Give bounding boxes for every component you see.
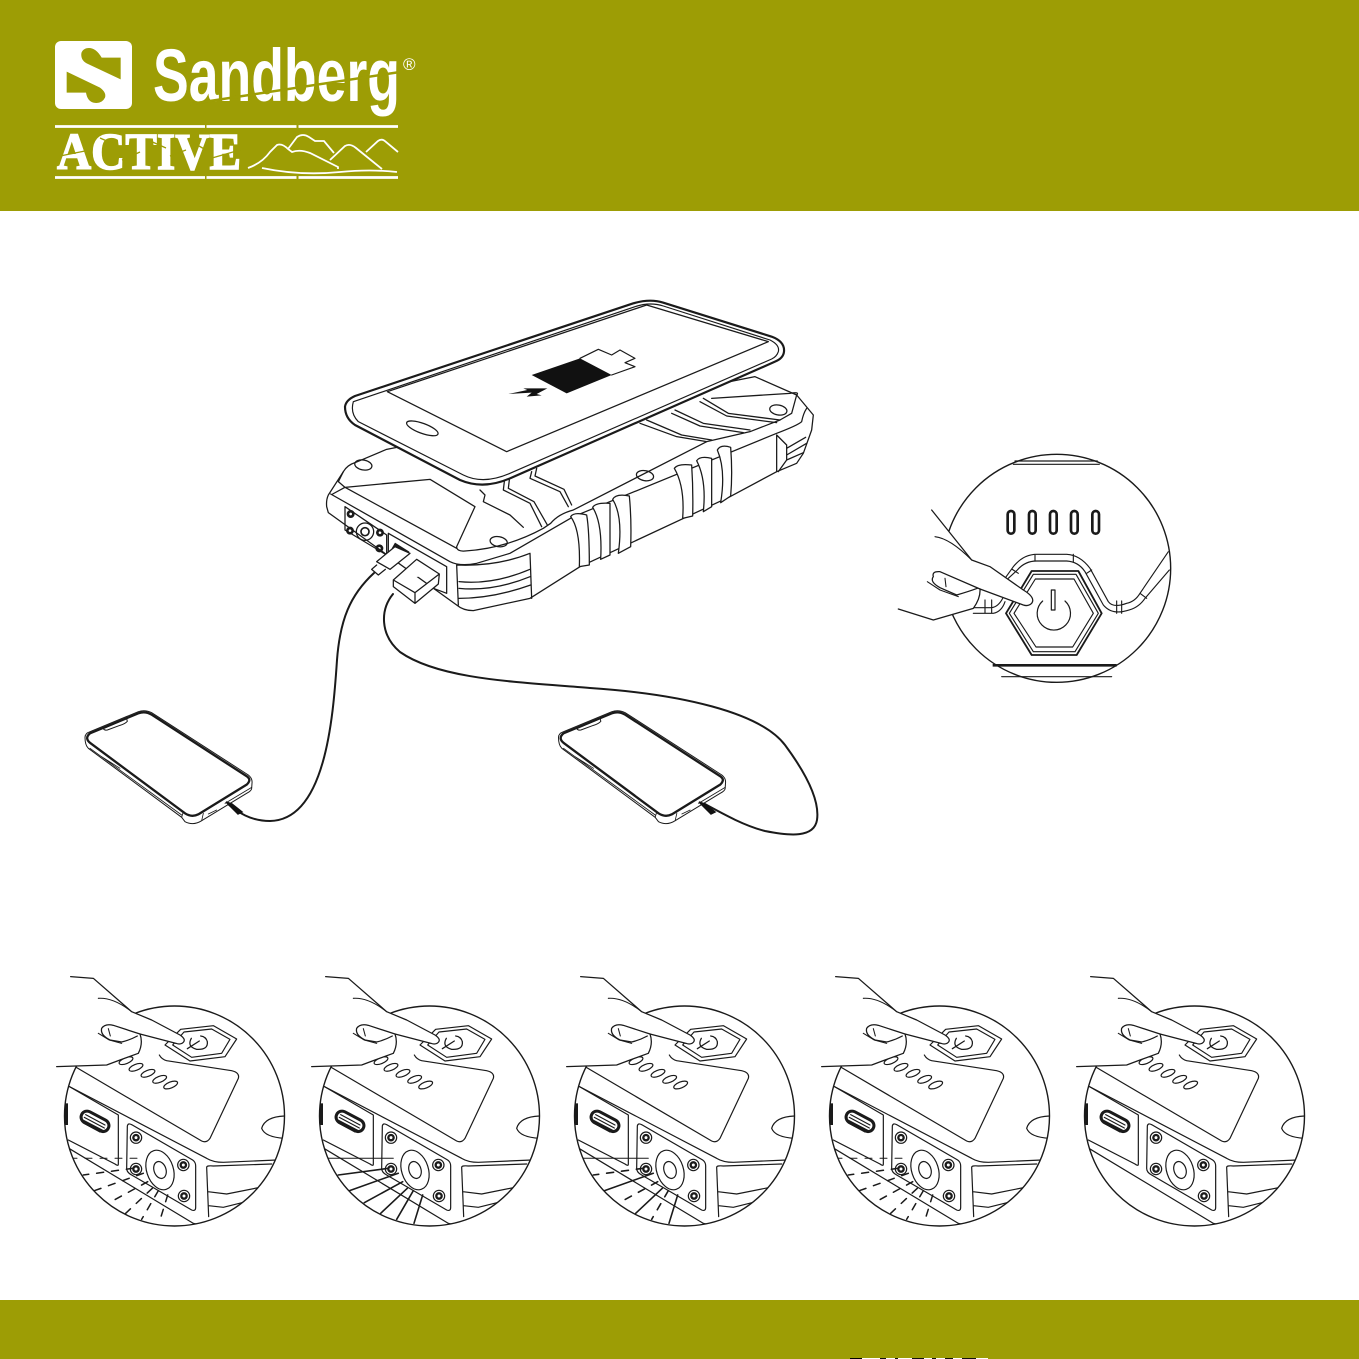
phone screen [387, 305, 768, 452]
hand pressing button [898, 510, 1033, 620]
logo: Sandberg [55, 34, 416, 117]
rays [835, 1158, 933, 1223]
panel: light off [1077, 977, 1305, 1227]
port plate [345, 507, 387, 555]
usb recess [388, 533, 447, 593]
icon: Sandberg S badge [55, 41, 132, 109]
circle outline [943, 454, 1171, 682]
right phone plug [699, 802, 715, 814]
phone home button [405, 418, 440, 439]
header band [0, 0, 1359, 211]
wordmark slash [190, 72, 400, 104]
registered mark: ® [403, 55, 416, 74]
wordmark active: ACTIVE [57, 124, 241, 181]
cable to left phone [228, 573, 374, 821]
far corner ribs [777, 435, 807, 472]
left phone [85, 711, 252, 824]
top face stripes [480, 398, 780, 527]
power bank body [327, 377, 813, 611]
front corner ribs [457, 553, 532, 605]
mounting holes [354, 404, 788, 548]
panel: power button detail [898, 454, 1171, 682]
icon: battery charging [508, 349, 635, 397]
panel: light mode 4 dashed rays [822, 977, 1050, 1227]
logo: Active [55, 124, 398, 181]
stencil cuts [60, 138, 240, 160]
phone on top [345, 301, 784, 485]
wordmark: Sandberg [153, 34, 400, 117]
button channel [973, 552, 1169, 613]
hexagon button [1006, 571, 1102, 655]
icon: power symbol [1037, 590, 1070, 630]
illustration: power bank with phone on top [327, 301, 813, 611]
render noise strip [850, 1358, 988, 1359]
left phone plug [226, 802, 242, 814]
LED indicators [1008, 511, 1099, 534]
top face rims [331, 393, 807, 565]
icon: mountains [248, 135, 398, 173]
footer band [0, 1300, 1359, 1359]
right phone [558, 711, 726, 824]
rays [580, 1158, 678, 1223]
rays [325, 1158, 423, 1223]
cable to right phone [384, 594, 817, 834]
rules [55, 126, 398, 178]
panel: light mode 1 dashed rays [57, 977, 285, 1227]
connector: USB-C plug [372, 547, 410, 575]
panel: light mode 2 solid rays [312, 977, 540, 1227]
top and bottom edges [1002, 461, 1112, 677]
side ribs [571, 495, 631, 567]
connector: USB-A plug [393, 559, 439, 603]
rays [70, 1158, 168, 1223]
panel: light mode 3 mixed rays [567, 977, 795, 1227]
